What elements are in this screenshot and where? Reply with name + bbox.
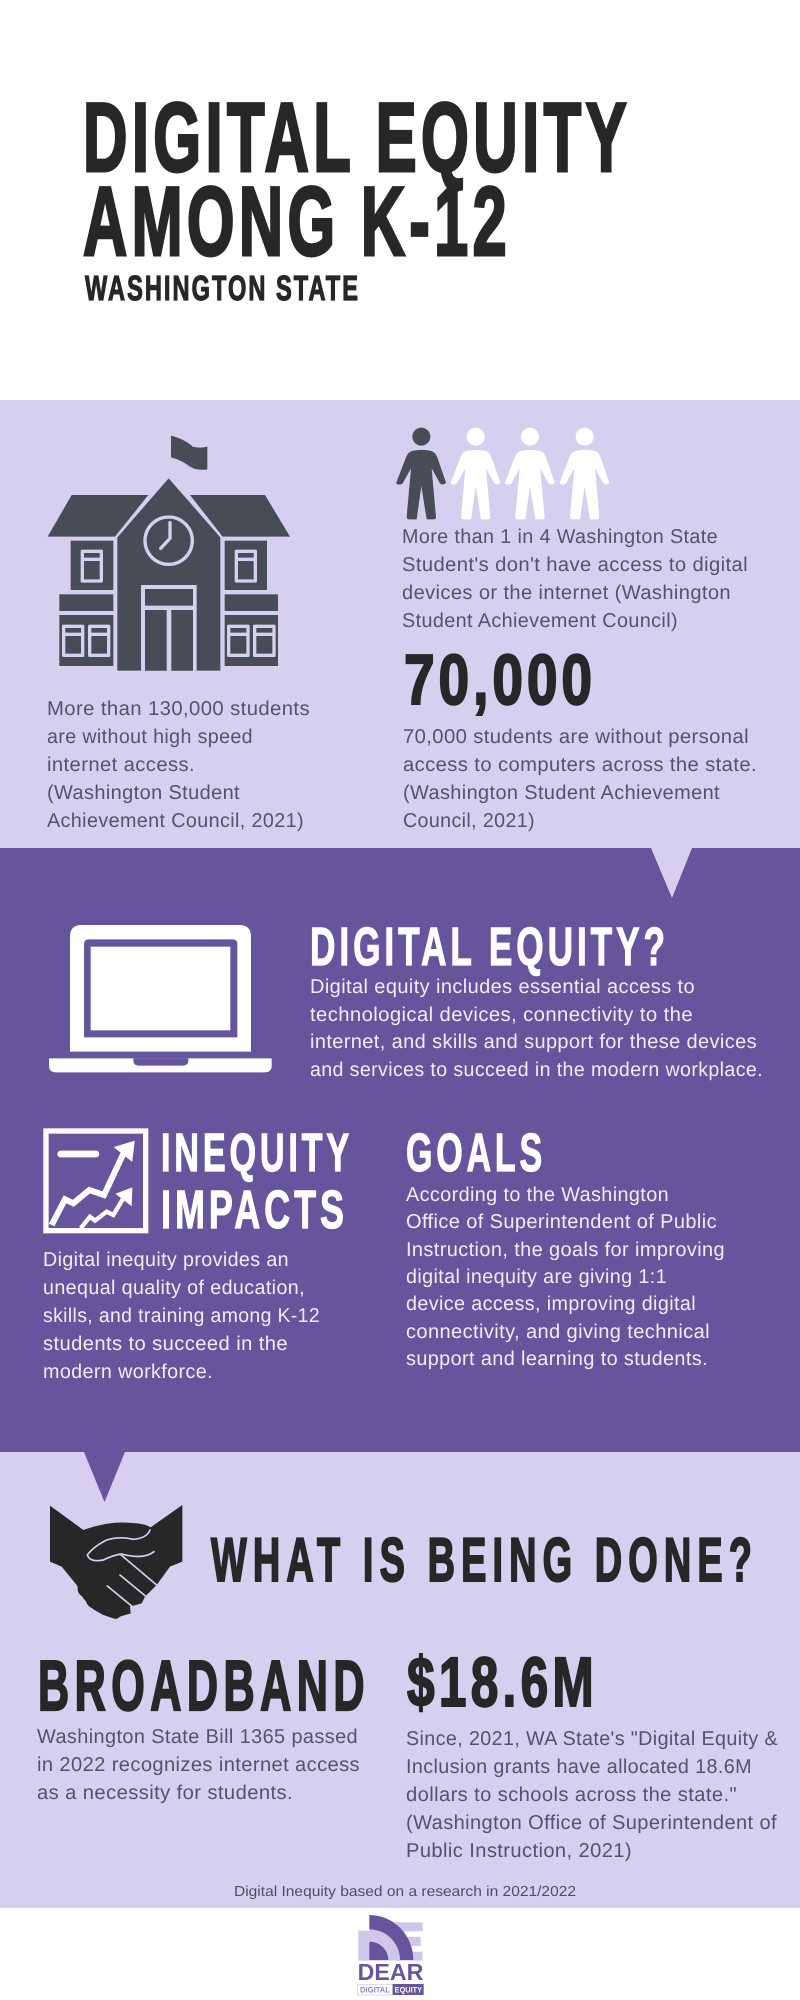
text: 1 in 4 students <box>402 526 748 632</box>
text: 1 in 4 students: Student Achievement Council) <box>402 610 678 632</box>
text: broadband: as a necessity for students. <box>37 1782 293 1804</box>
logo: DEAR digital equity <box>358 1915 424 1995</box>
text: inequity impacts: Digital inequity provides an <box>43 1249 289 1271</box>
panel: statistics <box>0 400 800 848</box>
text: 70,000 students: 70,000 students are without personal <box>403 726 749 748</box>
arrow: callout notch <box>84 1452 125 1502</box>
text: inequity impacts: unequal quality of education, <box>43 1277 305 1299</box>
text: inequity impacts: skills, and training among K-12 <box>43 1305 320 1327</box>
text: 1 in 4 students: devices or the internet (Washington <box>402 582 731 604</box>
arrow: callout notch <box>651 848 692 898</box>
text: 1 in 4 students: Student's don't have access to digital <box>402 554 748 576</box>
title block: WASHINGTON STATE <box>85 269 360 308</box>
title block <box>83 82 631 308</box>
text: 130,000 students: More than 130,000 students <box>47 698 310 720</box>
icon: school building <box>48 436 290 671</box>
text: goals: digital inequity are giving 1:1 <box>406 1266 667 1288</box>
heading: inequity impacts <box>161 1123 353 1240</box>
text: inequity impacts: students to succeed in the <box>43 1333 288 1355</box>
text: 130,000 students: are without high speed <box>47 726 253 748</box>
text: goals: device access, improving digital <box>406 1293 696 1315</box>
logo: DEAR digital equity: DIGITAL <box>360 1985 390 1994</box>
text: broadband: in 2022 recognizes internet access <box>37 1754 360 1776</box>
icon: handshake <box>50 1505 182 1621</box>
text: digital equity definition: and services to succeed in the modern workplace. <box>310 1059 763 1081</box>
text: goals: support and learning to students. <box>406 1348 708 1370</box>
panel: digital equity <box>0 848 800 1452</box>
text: grants: Inclusion grants have allocated 18.6M <box>406 1756 752 1778</box>
text: 1 in 4 students: More than 1 in 4 Washington State <box>402 526 718 548</box>
text: grants: (Washington Office of Superintendent of <box>406 1812 777 1834</box>
text: 70,000 students: access to computers across the state. <box>403 754 757 776</box>
text: goals: According to the Washington <box>406 1184 669 1206</box>
heading: goals: GOALS <box>406 1123 546 1183</box>
text: broadband <box>37 1726 360 1804</box>
heading: inequity impacts: IMPACTS <box>161 1180 348 1240</box>
text: digital equity definition: internet, and skills and support for these devices <box>310 1031 757 1053</box>
heading: broadband: BROADBAND <box>38 1647 370 1726</box>
text: 130,000 students <box>47 698 310 832</box>
statistic: 70,000: 70,000 <box>404 641 596 720</box>
text: grants: Since, 2021, WA State's "Digital Equity & <box>406 1728 778 1750</box>
panel: what is being done <box>0 1452 800 1908</box>
text: goals: Office of Superintendent of Public <box>406 1211 717 1233</box>
logo: DEAR digital equity: DEAR <box>358 1959 423 1985</box>
text: 70,000 students <box>403 726 757 832</box>
text: grants: Public Instruction, 2021) <box>406 1840 632 1862</box>
text: goals <box>406 1184 725 1370</box>
text: 130,000 students: Achievement Council, 2021) <box>47 810 304 832</box>
icon: laptop <box>49 925 272 1072</box>
text: broadband: Washington State Bill 1365 passed <box>37 1726 358 1748</box>
icon: rising chart <box>46 1131 146 1231</box>
text: digital equity definition: technological devices, connectivity to the <box>310 1004 693 1026</box>
icon: four people, one highlighted <box>396 428 609 519</box>
title block: AMONG K-12 <box>83 166 511 276</box>
text: 70,000 students: Council, 2021) <box>403 810 535 832</box>
text: 130,000 students: internet access. <box>47 754 195 776</box>
logo: DEAR digital equity: EQUITY <box>395 1985 422 1994</box>
text: inequity impacts: modern workforce. <box>43 1361 213 1383</box>
text: digital equity definition <box>310 976 763 1081</box>
text: grants: dollars to schools across the state." <box>406 1784 737 1806</box>
footnote: Digital Inequity based on a research in 2021/2022 <box>234 1884 576 1900</box>
text: 70,000 students: (Washington Student Achievement <box>403 782 720 804</box>
text: inequity impacts <box>43 1249 320 1383</box>
text: goals: connectivity, and giving technical <box>406 1321 710 1343</box>
text: digital equity definition: Digital equity includes essential access to <box>310 976 695 998</box>
heading: inequity impacts: INEQUITY <box>161 1123 353 1183</box>
statistic: 18.6M: $18.6M <box>407 1643 598 1721</box>
text: goals: Instruction, the goals for improving <box>406 1239 725 1261</box>
text: grants <box>406 1728 778 1862</box>
text: 130,000 students: (Washington Student <box>47 782 240 804</box>
